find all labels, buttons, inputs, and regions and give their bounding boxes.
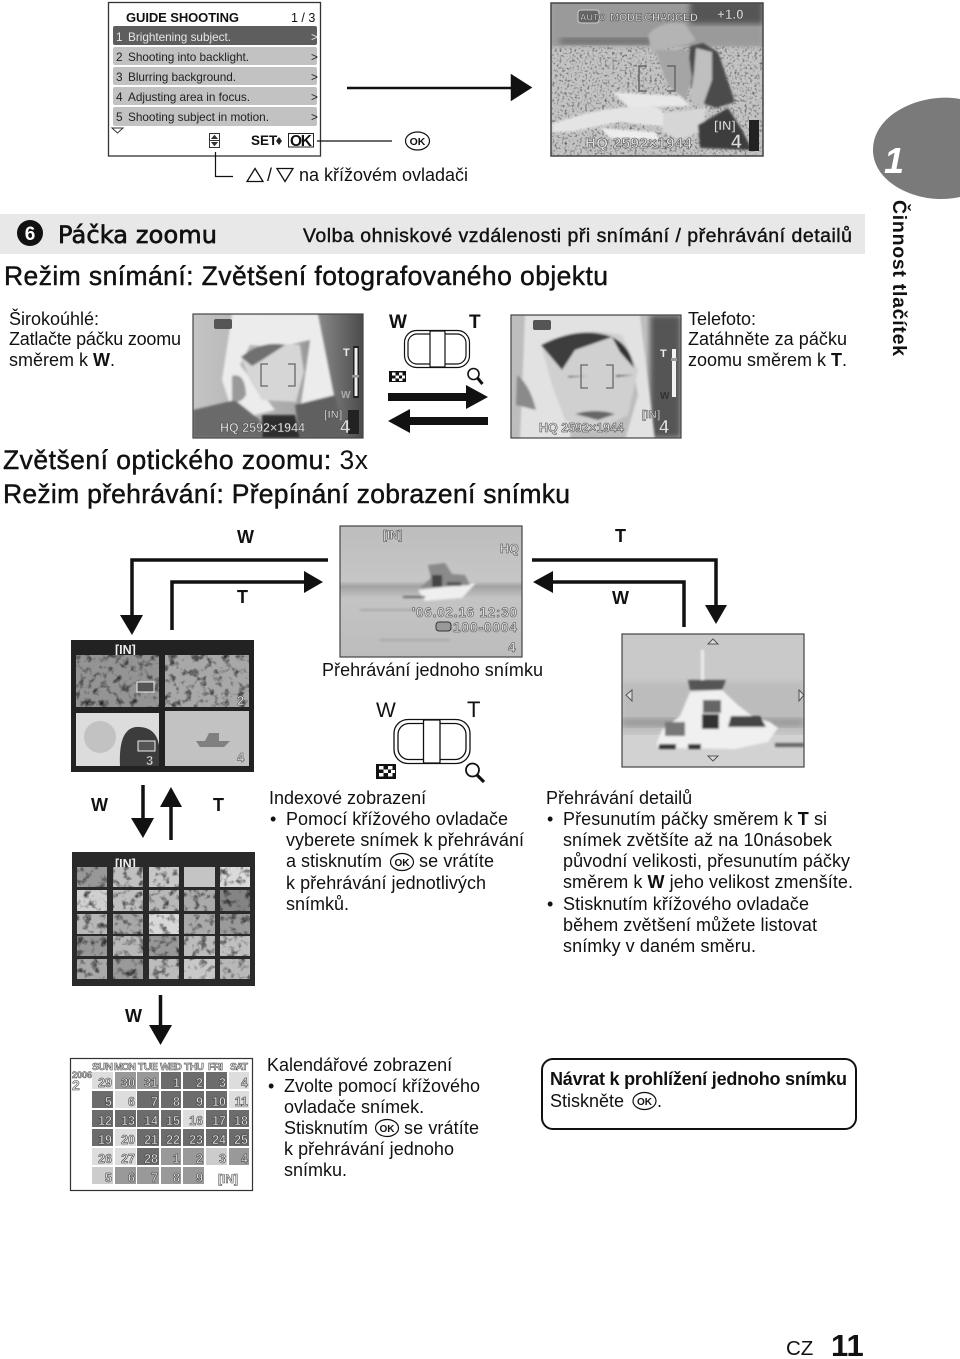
- weekday headers: [92, 1061, 249, 1073]
- heading: playback mode: Režim přehrávání: Přepínání zobrazení snímku: [3, 479, 570, 509]
- camera overlay text: 4: [340, 417, 350, 437]
- photo frame: [193, 314, 363, 438]
- panel: calendar view: [70, 1058, 252, 1190]
- photo: boat single frame: [340, 526, 522, 657]
- text: wide angle: Širokoúhlé:: [9, 308, 99, 329]
- icon: magnifier: [468, 368, 482, 384]
- label W: W: [612, 588, 629, 608]
- arrow: zoom out down: [131, 785, 154, 838]
- menu rows: >: [311, 90, 318, 104]
- text: index view: Indexové zobrazení: [269, 788, 426, 808]
- menu rows: >: [311, 30, 318, 44]
- labels W T: W: [389, 312, 407, 333]
- child figure: [516, 315, 655, 440]
- labels W T: T: [469, 312, 481, 333]
- day numbers: 1: [173, 1152, 180, 1166]
- icon: magnifier: [466, 764, 484, 782]
- icon: OK button: OK: [410, 136, 426, 148]
- zoom lever: [404, 330, 470, 368]
- icon: OK button: [376, 1120, 398, 1136]
- menu title: GUIDE SHOOTING: [126, 10, 239, 25]
- zoom bar: [660, 348, 677, 402]
- menu rows: >: [311, 110, 318, 124]
- day numbers: 31: [144, 1076, 158, 1090]
- camera overlay text: [IN]: [714, 118, 736, 133]
- day numbers: 3: [219, 1152, 226, 1166]
- zoom bar: T: [343, 347, 350, 359]
- text: calendar view: •: [268, 1076, 274, 1096]
- weekday headers: SAT: [230, 1061, 249, 1073]
- boat: [360, 563, 500, 640]
- day numbers: 14: [144, 1114, 158, 1128]
- zoom bar: W: [341, 390, 351, 401]
- heading: shooting mode: Režim snímání: Zvětšení fotografovaného objektu: [4, 261, 608, 291]
- icon: OK button: [633, 1092, 656, 1110]
- day numbers: 10: [212, 1095, 226, 1109]
- step number: [17, 220, 43, 246]
- arrow: single to detail: [532, 560, 727, 624]
- woman figure: [552, 23, 752, 150]
- photo frame: [622, 634, 804, 767]
- chapter tab: [873, 98, 960, 199]
- text: index view: snímků.: [286, 894, 349, 914]
- callout: return to single frame: Návrat k prohlížení jednoho snímku: [550, 1069, 847, 1089]
- panel: index view 25 thumbnails: [72, 852, 255, 986]
- text: calendar view: [267, 1055, 480, 1180]
- text: calendar view: k přehrávání jednoho: [284, 1139, 454, 1159]
- day numbers: 13: [121, 1114, 135, 1128]
- text: index view: [269, 788, 524, 914]
- camera overlay text: [533, 320, 669, 437]
- photo frame: [511, 315, 681, 438]
- callout: return to single frame: [542, 1059, 856, 1129]
- day numbers: 1: [173, 1076, 180, 1090]
- text: calendar view: snímku.: [284, 1160, 347, 1180]
- arrow: menu to photo: [347, 76, 530, 99]
- callout: return to single frame: .: [657, 1091, 662, 1111]
- panel: index view 25 thumbnails: [IN]: [115, 857, 136, 871]
- weekday headers: WED: [160, 1061, 182, 1073]
- text: telephoto: zoomu směrem k T.: [688, 350, 847, 370]
- camera overlay text: AUTO: [580, 12, 605, 22]
- overlay text: [IN]: [383, 530, 402, 542]
- panel: index view four thumbnails: [IN]: [115, 643, 136, 657]
- text: index view: vyberete snímek k přehrávání: [286, 830, 524, 850]
- weekday headers: SUN: [92, 1061, 113, 1073]
- day numbers: 8: [173, 1095, 180, 1109]
- section subtitle: Volba ohniskové vzdálenosti při snímání / přehrávání detailů: [303, 225, 852, 247]
- day numbers: 9: [196, 1171, 203, 1185]
- day numbers: 9: [196, 1095, 203, 1109]
- year month: 2006: [72, 1070, 92, 1080]
- zoom lever: [394, 720, 470, 764]
- menu rows: >: [311, 50, 318, 64]
- text: index view: k přehrávání jednotlivých: [286, 873, 486, 893]
- section band: [0, 214, 865, 254]
- panel: index view four thumbnails: 4: [237, 750, 245, 765]
- text: calendar view: se vrátíte: [404, 1118, 479, 1138]
- text: telephoto: [688, 309, 847, 370]
- set OK label: [251, 133, 314, 150]
- day numbers: 30: [121, 1076, 135, 1090]
- text: telephoto: Telefoto:: [688, 309, 756, 329]
- camera overlay text: [IN]: [642, 409, 661, 421]
- camera overlay text: HQ 2592×1944: [220, 421, 305, 435]
- day numbers: 6: [128, 1095, 135, 1109]
- year month: 2: [72, 1077, 80, 1093]
- icon: up/down selector: [210, 134, 220, 148]
- day numbers: [IN]: [218, 1172, 238, 1186]
- menu rows: Blurring background.: [128, 70, 236, 84]
- overlay text: '06.02.16 12:30: [412, 605, 517, 620]
- photo: child telephoto: [511, 315, 681, 440]
- arrow: single to index: [120, 560, 328, 635]
- zoom bar: [341, 346, 359, 401]
- text: detail playback: směrem k W jeho velikost zmenšíte.: [563, 872, 853, 892]
- text: index view: Pomocí křížového ovladače: [286, 809, 508, 829]
- label W: W: [91, 795, 108, 815]
- overlay text: 100-0004: [453, 620, 517, 635]
- label T: T: [237, 587, 248, 607]
- text: detail playback: Přehrávání detailů: [546, 788, 692, 808]
- set OK label: SET: [251, 133, 278, 148]
- day numbers: 5: [105, 1171, 112, 1185]
- text: index view: a stisknutím: [286, 851, 382, 871]
- camera overlay text: [580, 7, 744, 153]
- day numbers: 17: [212, 1114, 226, 1128]
- step number: 6: [25, 224, 35, 245]
- menu rows: 3: [116, 70, 123, 84]
- menu title: 1 / 3: [291, 11, 315, 25]
- menu rows: Shooting subject in motion.: [128, 110, 269, 124]
- cross key note: na křížovém ovladači: [299, 165, 468, 185]
- day numbers: 4: [241, 1076, 248, 1090]
- icon: OK button: [390, 854, 414, 870]
- arrow: detail to single: [533, 571, 684, 627]
- day numbers: 7: [151, 1171, 158, 1185]
- day numbers: 18: [234, 1114, 248, 1128]
- zoom bar: W: [660, 391, 670, 402]
- camera overlay text: HQ 2592×1944: [539, 421, 624, 435]
- callout: return to single frame: Stiskněte: [550, 1091, 624, 1111]
- connector line to OK button: [317, 140, 392, 142]
- menu rows: 4: [116, 90, 123, 104]
- arrow: to telephoto: [388, 385, 488, 409]
- camera overlay text: MODE CHANGED: [610, 12, 698, 24]
- photo frame: [551, 3, 763, 156]
- label T: T: [213, 795, 224, 815]
- day numbers: [98, 1076, 248, 1186]
- year month: [72, 1070, 92, 1093]
- camera overlay text: [214, 319, 359, 437]
- menu rows: [112, 26, 318, 133]
- day numbers: 11: [235, 1095, 248, 1109]
- cross key note: /: [267, 165, 272, 185]
- scroll arrows: [626, 639, 804, 761]
- text: detail playback: Stisknutím křížového ovladače: [563, 894, 809, 914]
- icon: index view: [389, 371, 406, 382]
- panel: guide shooting menu: [108, 2, 320, 156]
- day numbers: 4: [241, 1152, 248, 1166]
- caption: single frame: Přehrávání jednoho snímku: [322, 660, 543, 680]
- text: detail playback: snímky v daném směru.: [563, 936, 756, 956]
- overlay text: 4: [508, 640, 516, 655]
- day numbers: 21: [144, 1133, 158, 1147]
- icon: OK button: OK: [394, 858, 410, 869]
- child figure: [193, 314, 345, 438]
- heading: optical zoom: Zvětšení optického zoomu: 3x: [3, 445, 368, 475]
- labels W T: [389, 312, 481, 333]
- arrow: index to single: [172, 571, 323, 630]
- day numbers: 27: [121, 1152, 135, 1166]
- day numbers: 5: [105, 1095, 112, 1109]
- day numbers: 28: [144, 1152, 158, 1166]
- menu rows: 1: [116, 30, 123, 44]
- label W: W: [125, 1006, 142, 1026]
- text: detail playback: [546, 788, 853, 956]
- weekday headers: THU: [184, 1061, 204, 1073]
- day numbers: 24: [212, 1133, 226, 1147]
- day cells: [92, 1072, 249, 1184]
- label T: T: [615, 526, 626, 546]
- menu rows: Adjusting area in focus.: [128, 90, 250, 104]
- day numbers: 7: [151, 1095, 158, 1109]
- menu title: [126, 10, 315, 25]
- photo: child wide angle: [193, 314, 363, 438]
- icon: OK button: OK: [637, 1097, 653, 1108]
- zoom bar: T: [660, 348, 667, 360]
- day numbers: 8: [173, 1171, 180, 1185]
- section heading: Páčka zoomu: [58, 221, 217, 249]
- camera overlay text: +1.0: [717, 7, 744, 22]
- menu rows: 5: [116, 110, 123, 124]
- text: telephoto: Zatáhněte za páčku: [688, 329, 847, 349]
- menu rows: >: [311, 70, 318, 84]
- arrow: to calendar: [149, 995, 172, 1045]
- labels W T: [376, 697, 480, 722]
- thumbnails: [77, 867, 250, 979]
- text: detail playback: •: [547, 894, 553, 914]
- day numbers: 6: [128, 1171, 135, 1185]
- labels W T: W: [376, 699, 396, 722]
- text: detail playback: Přesunutím páčky směrem k T si: [563, 809, 827, 829]
- menu rows: 2: [116, 50, 123, 64]
- chapter title: Činnost tlačítek: [888, 200, 912, 356]
- day numbers: 26: [98, 1152, 112, 1166]
- weekday headers: FRI: [208, 1061, 223, 1073]
- photo: woman reading on grass: [551, 0, 763, 156]
- day numbers: 3: [219, 1076, 226, 1090]
- weekday headers: MON: [114, 1061, 136, 1073]
- text: wide angle: směrem k W.: [9, 350, 115, 370]
- panel: index view four thumbnails: 3: [146, 753, 153, 768]
- icon: index view: [376, 764, 396, 779]
- arrow: zoom in up: [160, 787, 182, 840]
- label W: W: [237, 527, 254, 547]
- day numbers: 29: [98, 1076, 112, 1090]
- weekday headers: TUE: [138, 1061, 158, 1073]
- camera overlay text: 4: [659, 417, 669, 437]
- day numbers: 19: [98, 1133, 112, 1147]
- connector line to cross key note: [216, 152, 233, 176]
- text: calendar view: ovladače snímek.: [284, 1097, 424, 1117]
- camera overlay text: 4: [731, 132, 742, 153]
- day numbers: 16: [189, 1114, 203, 1128]
- overlay text: HQ: [500, 542, 519, 556]
- day numbers: 22: [166, 1133, 180, 1147]
- day numbers: 2: [196, 1152, 203, 1166]
- text: detail playback: během zvětšení můžete listovat: [563, 915, 817, 935]
- arrow: to wide: [388, 409, 488, 433]
- text: detail playback: •: [547, 809, 553, 829]
- text: wide angle: Zatlačte páčku zoomu: [9, 329, 181, 349]
- day numbers: 25: [234, 1133, 248, 1147]
- text: calendar view: Stisknutím: [284, 1118, 368, 1138]
- photo: boat detail: [622, 634, 804, 767]
- set OK label: OK: [290, 133, 313, 150]
- text: calendar view: Kalendářové zobrazení: [267, 1055, 452, 1075]
- text: calendar view: Zvolte pomocí křížového: [284, 1076, 480, 1096]
- menu rows: Shooting into backlight.: [128, 50, 249, 64]
- panel: index view four thumbnails: [71, 640, 254, 772]
- photo frame: [340, 526, 522, 657]
- text: detail playback: snímek zvětšíte až na 10násobek: [563, 830, 833, 850]
- icon: OK button: OK: [380, 1124, 395, 1135]
- day numbers: 2: [196, 1076, 203, 1090]
- text: detail playback: původní velikosti, přesunutím páčky: [563, 851, 850, 871]
- icon: OK button: [406, 132, 430, 150]
- text: wide angle: [9, 308, 181, 370]
- menu rows: Brightening subject.: [128, 30, 231, 44]
- day numbers: 20: [121, 1133, 135, 1147]
- text: index view: se vrátíte: [419, 851, 494, 871]
- boat: [656, 650, 804, 749]
- day numbers: 23: [189, 1133, 203, 1147]
- text: index view: •: [270, 809, 276, 829]
- chapter tab: 1: [884, 140, 904, 181]
- panel: index view four thumbnails: 2: [237, 693, 244, 708]
- day numbers: 12: [98, 1114, 112, 1128]
- overlay text: [383, 530, 519, 655]
- day numbers: 15: [166, 1114, 180, 1128]
- labels W T: T: [467, 697, 480, 722]
- page number: [786, 1328, 864, 1359]
- camera overlay text: HQ 2592×1944: [585, 135, 693, 152]
- camera overlay text: [IN]: [324, 409, 343, 421]
